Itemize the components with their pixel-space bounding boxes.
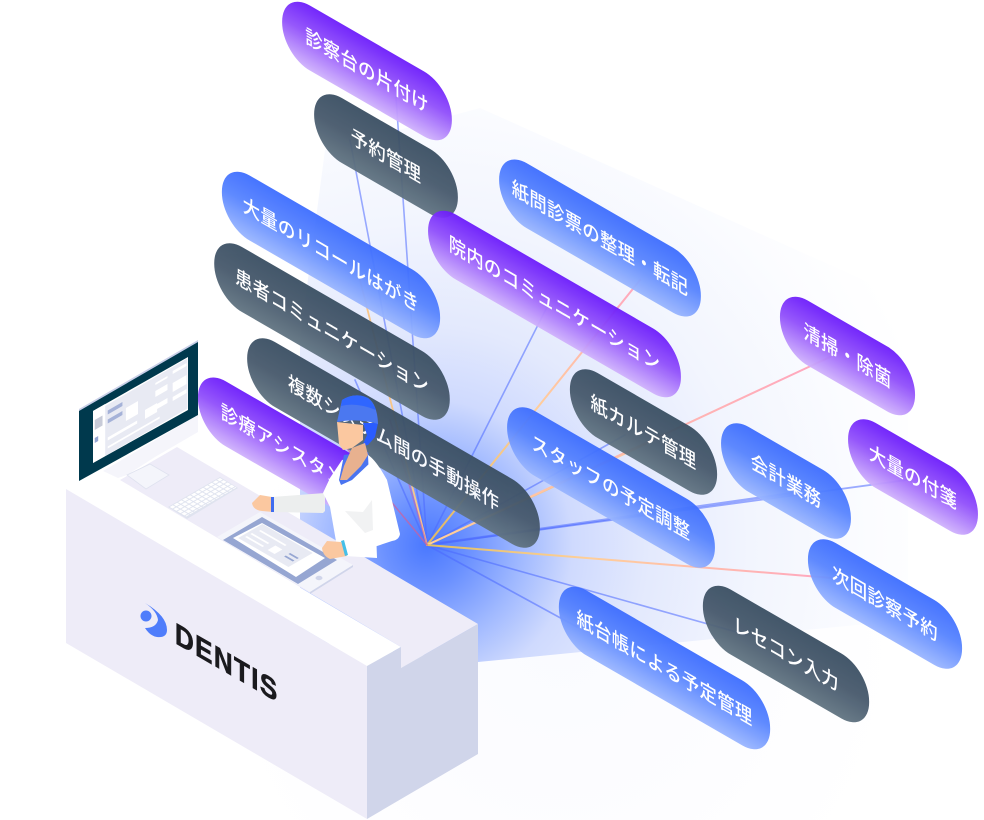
background plane with glow bbox=[220, 108, 908, 820]
coat sleeve bbox=[342, 455, 400, 556]
pill: 紙台帳による予定管理 bbox=[559, 574, 770, 762]
left arm sleeve bbox=[272, 493, 325, 513]
pill: 紙カルテ管理: 紙カルテ管理 bbox=[591, 390, 696, 475]
pill: 複数システム間の手動操作 bbox=[247, 326, 540, 560]
pill: 清掃・除菌: 清掃・除菌 bbox=[803, 320, 892, 393]
pill: 診察台の片付け: 診察台の片付け bbox=[305, 24, 429, 119]
trackpad bbox=[127, 464, 169, 489]
pill: 清掃・除菌 bbox=[780, 284, 915, 428]
left cuff bbox=[271, 497, 274, 512]
pill: スタッフの予定調整: スタッフの予定調整 bbox=[532, 431, 690, 545]
logo wordmark: DENTIS bbox=[175, 617, 279, 710]
pill: 次回診察予約 bbox=[808, 527, 962, 681]
pill: レセコン入力: レセコン入力 bbox=[733, 612, 839, 697]
neck bbox=[340, 443, 368, 480]
pill: 会計業務: 会計業務 bbox=[751, 450, 821, 513]
reception desk bbox=[66, 447, 478, 819]
pill: 紙カルテ管理 bbox=[570, 357, 717, 507]
pill: 大量のリコールはがき: 大量のリコールはがき bbox=[243, 193, 419, 318]
left hand bbox=[252, 495, 273, 512]
connecting lines from the receptionist bbox=[340, 97, 907, 635]
monitor bbox=[79, 340, 198, 481]
pill: 予約管理 bbox=[314, 82, 458, 230]
right cuff bbox=[341, 540, 348, 556]
coat fold bbox=[345, 500, 373, 533]
pill: 紙問診票の整理・転記 bbox=[499, 147, 701, 329]
pill: 複数システム間の手動操作: 複数システム間の手動操作 bbox=[288, 371, 499, 516]
hair bbox=[362, 423, 378, 446]
logo: DENTIS bbox=[140, 603, 279, 710]
pill: 会計業務 bbox=[721, 411, 851, 551]
pill: 予約管理: 予約管理 bbox=[351, 125, 421, 188]
pill: 患者コミュニケーション: 患者コミュニケーション bbox=[235, 265, 429, 399]
pill: 大量の付箋: 大量の付箋 bbox=[869, 441, 957, 514]
pill: 紙問診票の整理・転記: 紙問診票の整理・転記 bbox=[512, 176, 688, 301]
pill: 院内のコミュニケーション: 院内のコミュニケーション bbox=[449, 232, 660, 377]
pill: 次回診察予約: 次回診察予約 bbox=[832, 562, 938, 647]
keyboard bbox=[168, 477, 238, 519]
collar bbox=[339, 452, 371, 485]
pill: スタッフの予定調整 bbox=[507, 395, 715, 580]
icon: logo mark bbox=[140, 603, 167, 637]
tablet bbox=[217, 512, 353, 594]
face bbox=[337, 422, 363, 450]
monitor screen content bbox=[93, 356, 187, 463]
pill: 大量のリコールはがき bbox=[222, 160, 440, 350]
coat body bbox=[323, 455, 387, 558]
pill: 診察台の片付け bbox=[282, 0, 452, 152]
pill: レセコン入力 bbox=[703, 574, 869, 734]
receptionist figure bbox=[252, 395, 400, 559]
pill: 院内のコミュニケーション bbox=[428, 198, 681, 410]
pill: 診療アシスタント bbox=[198, 365, 384, 538]
right hand bbox=[322, 541, 347, 559]
pill: 紙台帳による予定管理: 紙台帳による予定管理 bbox=[576, 606, 753, 731]
pill: 患者コミュニケーション bbox=[214, 231, 450, 432]
pill: 診療アシスタント: 診療アシスタント bbox=[221, 400, 361, 504]
pill: 大量の付箋 bbox=[848, 407, 978, 547]
cap bbox=[337, 395, 378, 424]
